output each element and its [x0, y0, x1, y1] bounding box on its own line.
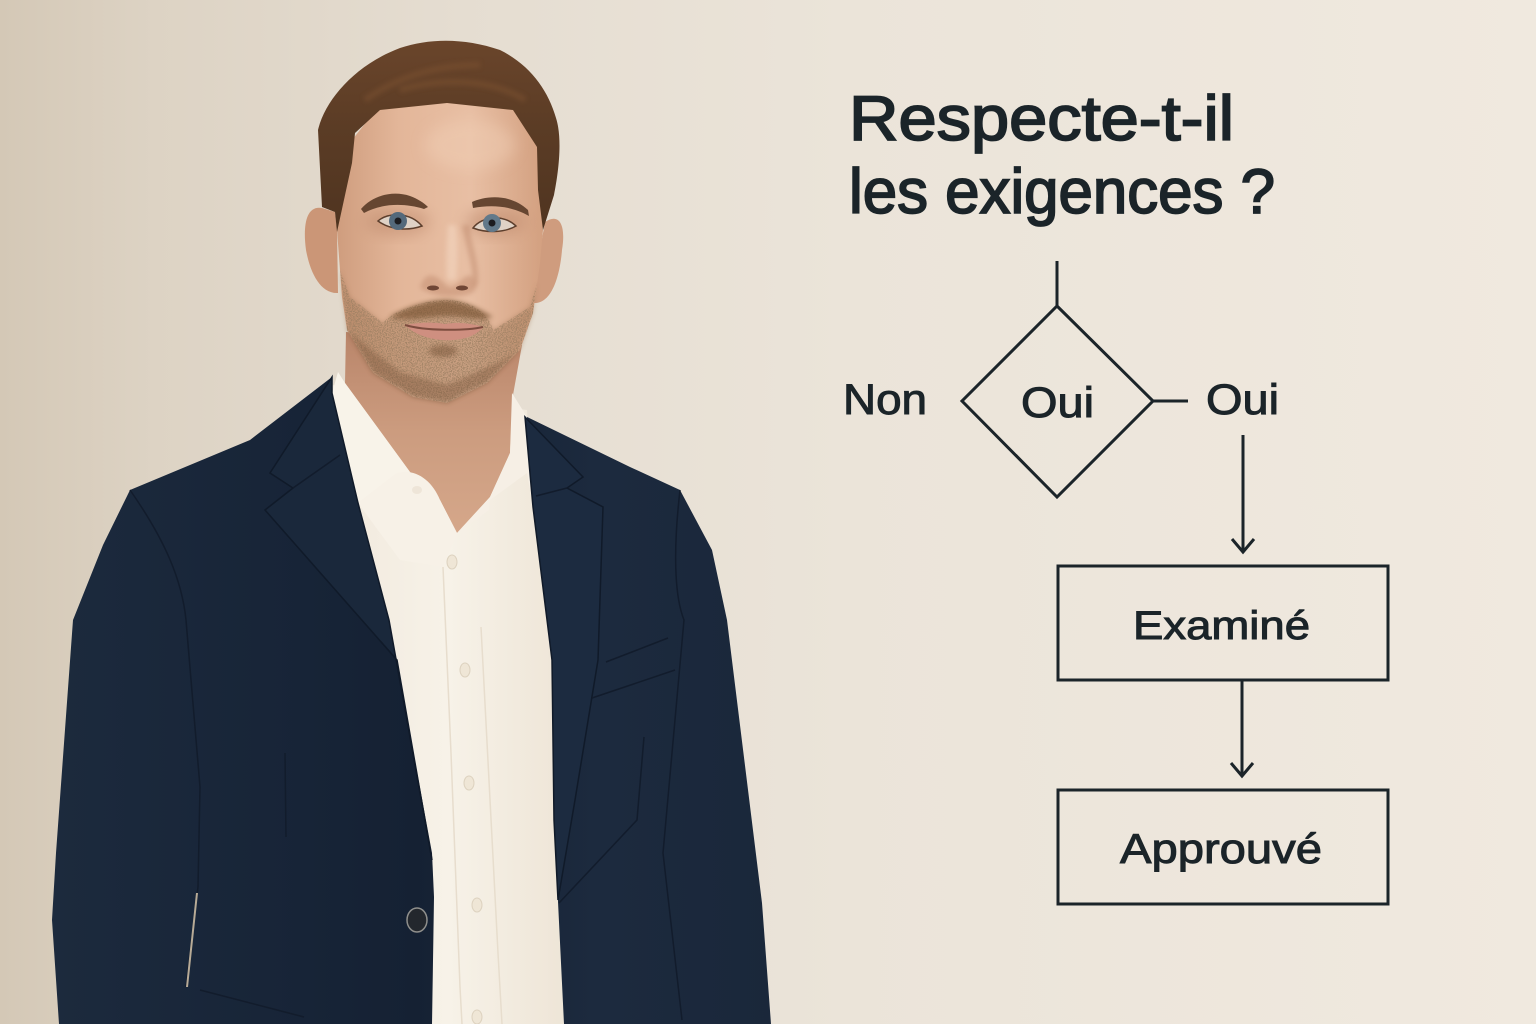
forehead highlight — [425, 120, 515, 170]
white shirt — [332, 385, 564, 1024]
decision diamond: Oui — [1021, 379, 1094, 427]
mouth — [405, 323, 483, 340]
hair highlights — [365, 65, 525, 100]
sleeve seams, pockets and darts — [130, 455, 684, 1020]
hair — [318, 41, 560, 232]
flowchart — [843, 261, 1388, 904]
decision diamond — [962, 306, 1153, 497]
arrow down to approuvé — [1231, 681, 1253, 776]
eye socket shading — [366, 208, 525, 236]
soul patch — [429, 345, 457, 357]
portrait: man in navy blazer — [52, 41, 771, 1024]
lapel right — [525, 417, 603, 900]
ears — [305, 208, 563, 303]
blazer left side — [52, 377, 434, 1024]
box: examiné — [1058, 566, 1388, 680]
title: Respecte-t-il — [849, 84, 1234, 154]
box: examiné: Examiné — [1133, 604, 1310, 648]
blazer right side — [523, 415, 771, 1024]
eyebrows — [361, 194, 529, 216]
title — [849, 84, 1275, 227]
connector to oui — [1153, 400, 1188, 402]
face — [337, 90, 543, 403]
shirt placket and buttons — [412, 486, 502, 1024]
neck — [345, 332, 522, 533]
lapel left — [265, 377, 432, 860]
box: approuvé: Approuvé — [1120, 825, 1322, 872]
label: oui: Oui — [1206, 376, 1279, 424]
blazer button — [407, 908, 427, 932]
sleeve gap — [186, 893, 198, 987]
label: non: Non — [843, 376, 927, 424]
nose — [420, 225, 478, 296]
title: les exigences ? — [849, 157, 1275, 227]
arrow down to examiné — [1232, 435, 1254, 552]
entry line — [1056, 261, 1058, 306]
box: approuvé — [1058, 790, 1388, 904]
stubble beard — [340, 270, 537, 403]
shirt collar — [332, 372, 533, 567]
moustache — [390, 300, 493, 319]
eyes — [378, 212, 516, 232]
